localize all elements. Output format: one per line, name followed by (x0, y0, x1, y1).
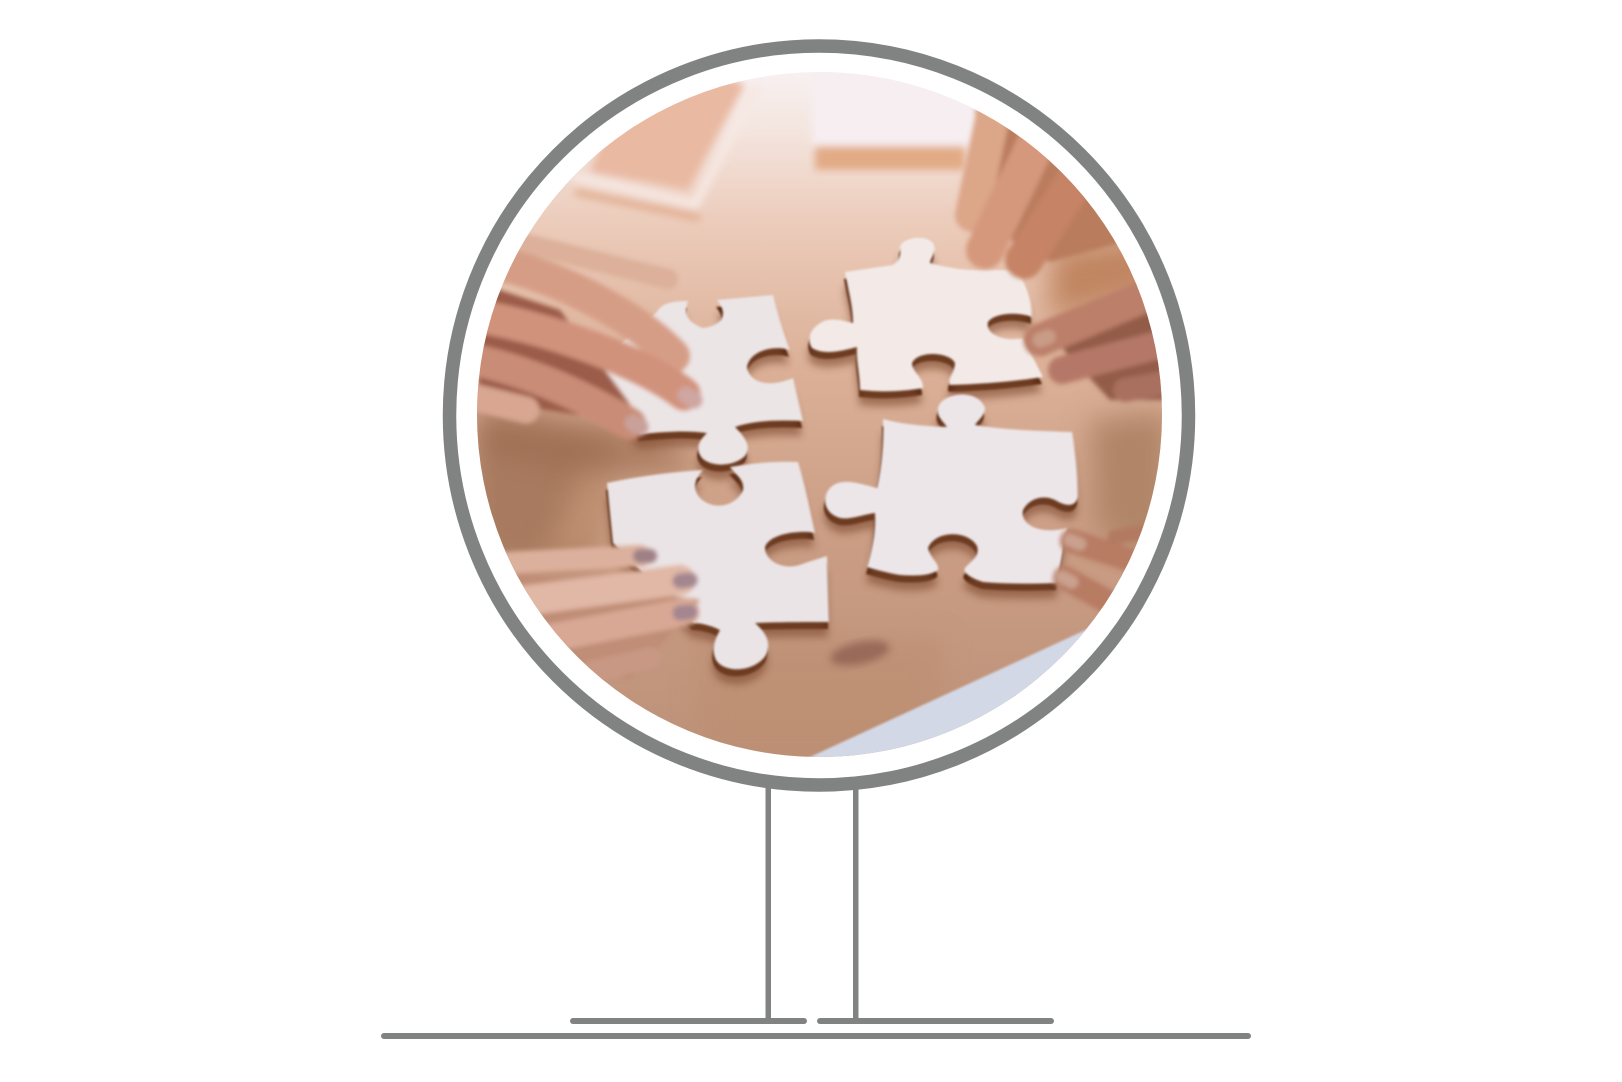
hand: lower right (1062, 532, 1145, 604)
stand: left and right poles (766, 786, 858, 1023)
paper at bottom right (809, 628, 1087, 757)
puzzle piece: top left (585, 295, 803, 465)
puzzle piece: bottom right (825, 394, 1078, 584)
hand: upper left (465, 243, 694, 427)
hand: right (1040, 290, 1170, 400)
sign ring (450, 46, 1188, 785)
tablet on the table (572, 80, 748, 224)
stain on the wood (828, 636, 892, 670)
piece shadows (584, 245, 1077, 676)
blurred object at top right (810, 98, 974, 174)
light wood streak (552, 472, 598, 547)
illustration: round sign on a stand (381, 39, 1251, 1039)
photo: hands joining puzzle pieces (465, 60, 1170, 790)
dark wood right (700, 230, 1170, 760)
hand: upper right (972, 105, 1170, 262)
hand: lower left (500, 556, 700, 680)
puzzle piece: top right (809, 238, 1043, 391)
ground line (381, 1033, 1251, 1039)
puzzle piece: bottom left (607, 462, 829, 669)
stand: left foot (570, 1018, 807, 1024)
stand: right foot (817, 1018, 1054, 1024)
dark wood left (470, 400, 700, 570)
